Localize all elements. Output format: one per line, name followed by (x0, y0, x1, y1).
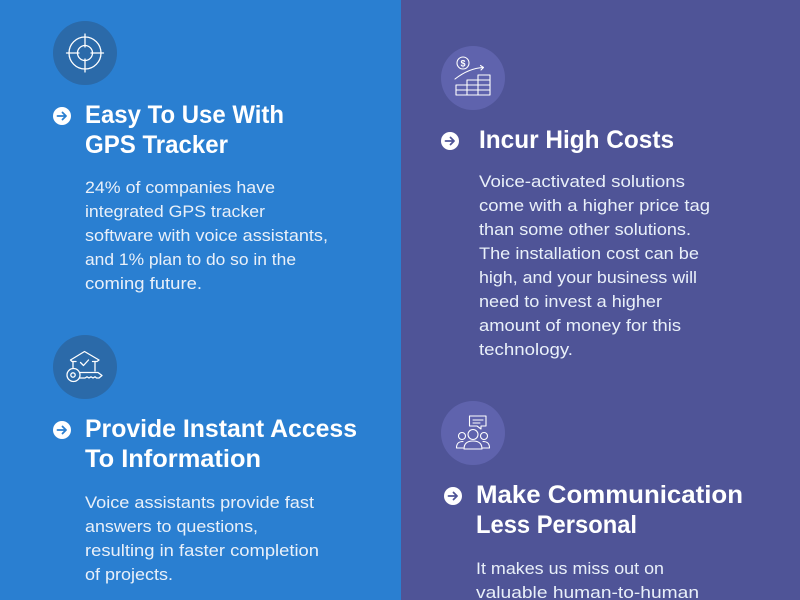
text block: GPS tracker statistics: software with voice assistants, (85, 226, 328, 245)
heading: provide instant access to information (85, 415, 357, 473)
icon: house and key (53, 335, 117, 399)
text block: cost explanation (479, 172, 710, 359)
text block: GPS tracker statistics: coming future. (85, 274, 202, 293)
text block: GPS tracker statistics (85, 178, 328, 293)
heading: easy to use with GPS tracker: Easy To Use With (85, 101, 284, 129)
heading: incur high costs: Incur High Costs (479, 126, 674, 154)
text block: cost explanation: than some other solutions. (479, 220, 691, 239)
heading: provide instant access to information: To Information (85, 445, 261, 473)
text block: voice assistant answers: resulting in faster completion (85, 541, 319, 560)
text block: cost explanation: Voice-activated solutions (479, 172, 685, 191)
heading: make communication less personal (476, 481, 743, 539)
text block: voice assistant answers (85, 493, 319, 584)
text block: human interaction: It makes us miss out on (476, 559, 664, 578)
text block: voice assistant answers: Voice assistants provide fast (85, 493, 314, 512)
heading: easy to use with GPS tracker: GPS Tracker (85, 131, 228, 159)
text block: cost explanation: come with a higher price tag (479, 196, 710, 215)
text block: GPS tracker statistics: integrated GPS tracker (85, 202, 265, 221)
icon: people with speech bubble (441, 401, 505, 465)
icon: arrow bullet less personal (444, 487, 462, 505)
heading: make communication less personal: Less Personal (476, 511, 637, 539)
heading: provide instant access to information: Provide Instant Access (85, 415, 357, 443)
text block: cost explanation: high, and your business will (479, 268, 697, 287)
icon: arrow bullet high costs (441, 132, 459, 150)
panel: right drawbacks background (401, 0, 800, 600)
text block: human interaction (476, 559, 699, 600)
text block: GPS tracker statistics: and 1% plan to do so in the (85, 250, 296, 269)
icon: arrow bullet instant access (53, 421, 71, 439)
heading: easy to use with GPS tracker (85, 101, 284, 159)
icon: arrow bullet easy to use (53, 107, 71, 125)
text block: cost explanation: technology. (479, 340, 573, 359)
text block: voice assistant answers: answers to questions, (85, 517, 258, 536)
text block: voice assistant answers: of projects. (85, 565, 173, 584)
panel: left benefits background (0, 0, 401, 600)
text block: cost explanation: need to invest a higher (479, 292, 662, 311)
text block: GPS tracker statistics: 24% of companies have (85, 178, 275, 197)
heading: make communication less personal: Make Communication (476, 481, 743, 509)
icon: costs chart (441, 46, 505, 110)
icon: GPS target (53, 21, 117, 85)
text block: cost explanation: amount of money for this (479, 316, 681, 335)
text block: cost explanation: The installation cost can be (479, 244, 699, 263)
dollar sign: $ (460, 58, 466, 68)
